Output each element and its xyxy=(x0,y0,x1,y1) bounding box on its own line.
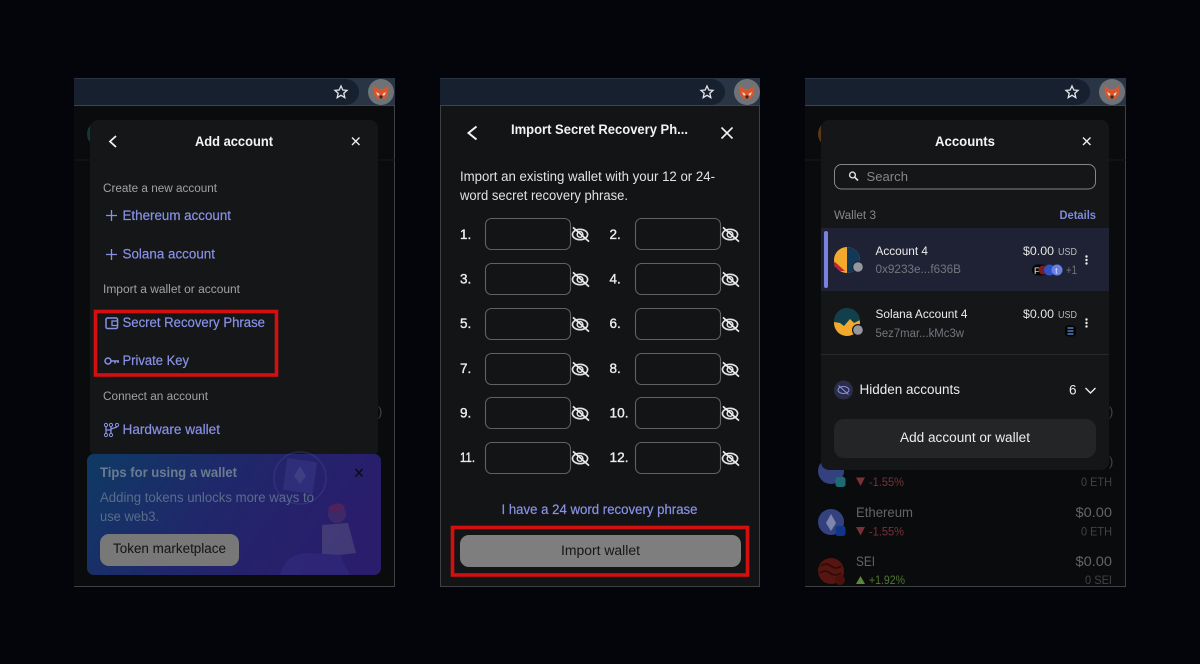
word row 3: 6. xyxy=(610,316,621,331)
add account or wallet button: Add account or wallet xyxy=(900,430,1030,445)
screen title: Import Secret Recovery Ph... xyxy=(511,122,688,137)
import wallet button xyxy=(460,535,741,567)
account row: solana: 5ez7mar...kMc3w xyxy=(876,328,965,340)
avatar: solana account xyxy=(834,308,864,336)
word row 4 xyxy=(460,354,739,384)
account row: solana: Solana Account 4 xyxy=(876,309,968,321)
word row 4: 8. xyxy=(610,361,621,376)
hardware wallet option: Hardware wallet xyxy=(122,422,220,437)
avatar: account 4 xyxy=(834,247,864,273)
highlight box: import wallet xyxy=(452,528,748,575)
wallet label: Wallet 3 xyxy=(834,210,876,222)
word row 5: 9. xyxy=(460,406,471,420)
dimmed character illustration xyxy=(274,452,356,575)
token row: SEI: +1.92% xyxy=(869,573,905,587)
browser toolbar xyxy=(74,78,395,106)
close icon xyxy=(352,138,360,145)
word row 2: 4. xyxy=(610,272,621,286)
secret recovery phrase option: Secret Recovery Phrase xyxy=(122,315,265,330)
highlight box: import options xyxy=(96,312,276,375)
hidden accounts row: Hidden accounts xyxy=(860,382,960,397)
dimmed token list xyxy=(818,404,1113,587)
tips close xyxy=(356,469,362,476)
account row: selected: Account 4 xyxy=(876,246,929,258)
word row 6: 11. xyxy=(460,450,475,465)
section label: create: Create a new account xyxy=(103,183,218,195)
word row 2: 3. xyxy=(460,272,471,286)
token marketplace button xyxy=(100,534,239,566)
word row 1: 2. xyxy=(610,227,621,242)
private key option: Private Key xyxy=(122,353,189,368)
dimmed balances peeking out: ) xyxy=(1109,404,1113,419)
token row: SEI: SEI xyxy=(856,553,875,569)
token row: ethereum: Ethereum xyxy=(856,504,913,520)
instructions: word secret recovery phrase. xyxy=(459,188,628,203)
token row: partly hidden ethereum: -1.55% xyxy=(869,475,904,489)
tips heading: Tips for using a wallet xyxy=(100,465,237,480)
search box: Search xyxy=(866,169,908,184)
tips card: use web3. xyxy=(100,509,159,524)
modal title: Accounts xyxy=(935,134,995,149)
back chevron xyxy=(110,136,116,147)
word row 3: 5. xyxy=(460,316,471,331)
solana token badge xyxy=(1065,326,1076,336)
token badges xyxy=(1032,264,1062,276)
hidden accounts row: 6 xyxy=(1069,382,1077,398)
token row: ethereum: -1.55% xyxy=(869,524,904,538)
token row: SEI xyxy=(818,553,1112,587)
token row: SEI: 0 SEI xyxy=(1085,573,1112,587)
tips card xyxy=(87,452,381,575)
section label: connect: Connect an account xyxy=(103,391,209,403)
word fields grid xyxy=(460,218,739,474)
import wallet button: Import wallet xyxy=(561,543,640,558)
word row 6: 12. xyxy=(610,450,628,465)
close icon xyxy=(1083,138,1090,145)
account row: solana: USD xyxy=(1058,309,1077,321)
search box xyxy=(834,164,1096,189)
24 word link: I have a 24 word recovery phrase xyxy=(502,502,698,517)
panel: import secret recovery phrase screen xyxy=(440,78,760,587)
account row: selected: $0.00 xyxy=(1023,244,1054,258)
row menu dots xyxy=(1085,318,1088,328)
hidden accounts row xyxy=(834,380,1096,400)
word row 2 xyxy=(460,264,739,294)
dimmed avatar behind modal xyxy=(818,121,844,147)
dimmed avatar behind modal xyxy=(87,121,113,147)
modal title: Add account xyxy=(195,134,273,149)
close icon xyxy=(722,128,732,138)
token row: ethereum: 0 ETH xyxy=(1081,524,1112,538)
token row: partly hidden ethereum: 0 ETH xyxy=(1081,475,1112,489)
account row: selected xyxy=(821,228,1109,291)
row menu dots xyxy=(1085,255,1088,265)
token badges: t xyxy=(1055,266,1058,276)
browser toolbar xyxy=(440,78,760,106)
browser toolbar xyxy=(805,78,1126,106)
account row: solana xyxy=(834,307,1088,340)
dimmed balance behind modal: ) xyxy=(378,404,382,419)
instructions: Import an existing wallet with your 12 or 24- xyxy=(460,169,715,184)
panel: add account screen xyxy=(74,78,395,587)
word row 1: 1. xyxy=(460,227,471,242)
word row 5 xyxy=(460,398,739,428)
account row: selected: USD xyxy=(1058,246,1077,258)
back chevron xyxy=(468,126,476,140)
token row: ethereum: $0.00 xyxy=(1076,504,1112,520)
details link: Details xyxy=(1060,210,1096,222)
tips body: Adding tokens unlocks more ways to xyxy=(100,490,314,505)
word row 4: 7. xyxy=(460,361,471,376)
modal: accounts xyxy=(821,120,1109,470)
panel: accounts screen xyxy=(805,78,1126,587)
word row 1 xyxy=(460,218,739,250)
dimmed token list: ) xyxy=(1109,454,1113,469)
token row: ethereum xyxy=(818,504,1112,538)
token row: partly hidden ethereum xyxy=(818,458,1112,489)
account row: selected: +1 xyxy=(1066,265,1077,277)
word row 3 xyxy=(460,308,739,340)
add account or wallet button xyxy=(834,419,1096,458)
word row 5: 10. xyxy=(610,406,628,420)
token badges: F xyxy=(1034,266,1040,276)
account row: selected: 0x9233e...f636B xyxy=(876,264,961,276)
solana option: Solana account xyxy=(122,246,215,262)
account row: solana: $0.00 xyxy=(1023,307,1054,321)
ethereum option: Ethereum account xyxy=(122,208,231,223)
section label: import: Import a wallet or account xyxy=(103,284,241,296)
instructions xyxy=(459,169,715,203)
word row 6 xyxy=(460,442,739,474)
token marketplace button: Token marketplace xyxy=(113,541,226,556)
token row: SEI: $0.00 xyxy=(1076,553,1112,569)
modal: add account xyxy=(90,120,378,457)
